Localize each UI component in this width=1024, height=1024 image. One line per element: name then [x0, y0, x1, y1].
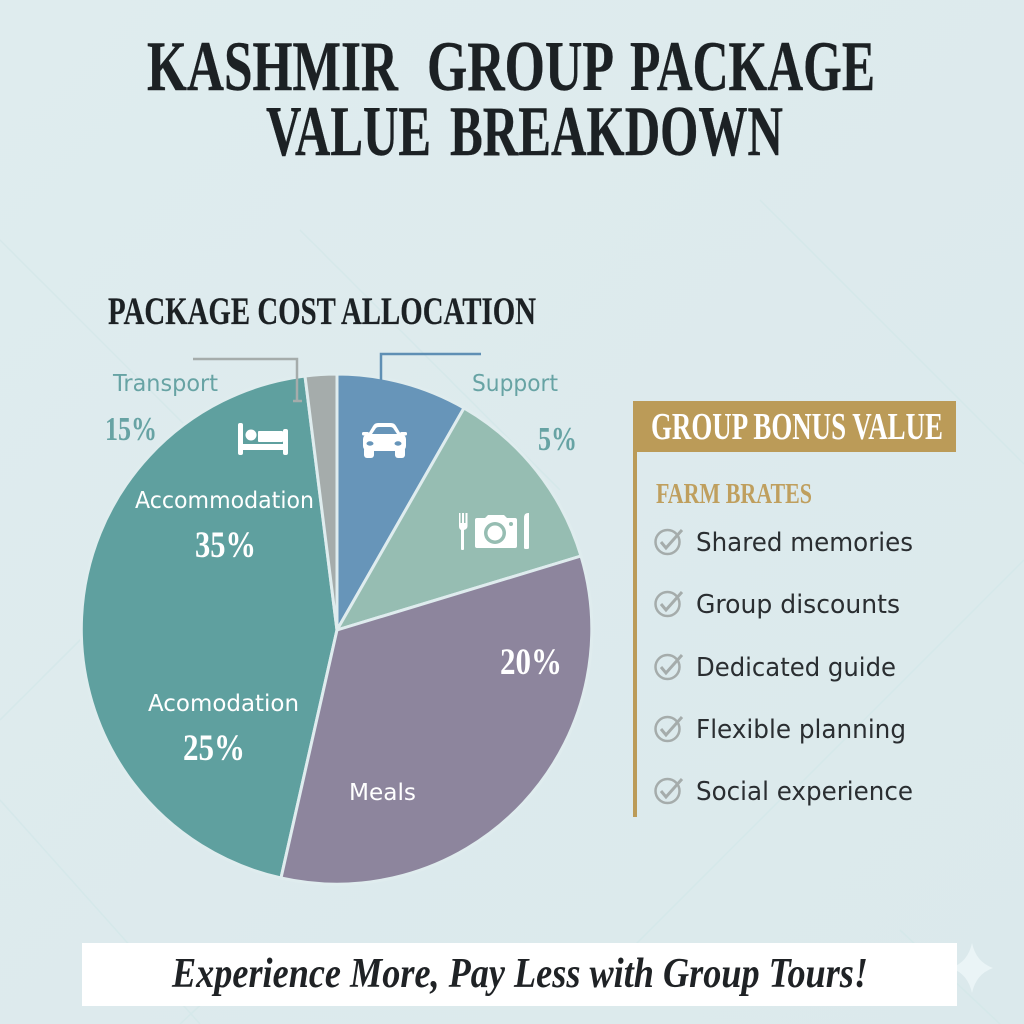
tagline: Experience More, Pay Less with Group Tours! [171, 951, 868, 997]
slice: purple meals [281, 556, 592, 884]
title: BREAKDOWN [450, 93, 783, 171]
title: VALUE [266, 93, 431, 171]
slice: teal accommodation [81, 376, 337, 878]
panel rule [633, 452, 637, 817]
pie chart [81, 374, 592, 884]
item: Dedicated guide: Dedicated guide [696, 653, 896, 683]
leader line: transport [193, 359, 302, 401]
item: Flexible planning: Flexible planning [696, 715, 906, 745]
title: GROUP [427, 28, 614, 106]
icon: bed [238, 423, 288, 455]
value: 15%: 15% [105, 411, 157, 448]
slice: blue transport [337, 374, 464, 630]
leader line: support [381, 354, 481, 380]
label: Meals: Meals [349, 780, 416, 806]
item: Shared memories: Shared memories [696, 528, 913, 558]
item: Social experience: Social experience [696, 777, 913, 807]
value: 35%: 35% [195, 525, 256, 566]
icon: sparkle [951, 943, 993, 993]
value: 25%: 25% [183, 728, 245, 769]
footer banner [82, 943, 957, 1006]
icon: car [362, 423, 407, 458]
subheading: FARM BRATES [656, 478, 812, 510]
title: KASHMIR [147, 28, 399, 106]
chart heading: PACKAGE COST ALLOCATION [108, 290, 536, 333]
slice: grey [305, 374, 337, 630]
label: Acomodation: Acomodation [148, 691, 299, 717]
icon: fork, camera and knife [459, 513, 529, 550]
label: Transport: Transport [112, 371, 218, 397]
item: Group discounts: Group discounts [696, 590, 900, 620]
panel header [633, 401, 956, 452]
slice: green support [337, 408, 581, 630]
value: 20%: 20% [500, 642, 562, 683]
value: 5%: 5% [538, 421, 577, 458]
title [147, 28, 875, 171]
label: Support: Support [472, 371, 558, 397]
title: PACKAGE [630, 28, 875, 106]
label: Accommodation: Accommodation [135, 488, 314, 514]
panel: group bonus value [633, 401, 956, 817]
